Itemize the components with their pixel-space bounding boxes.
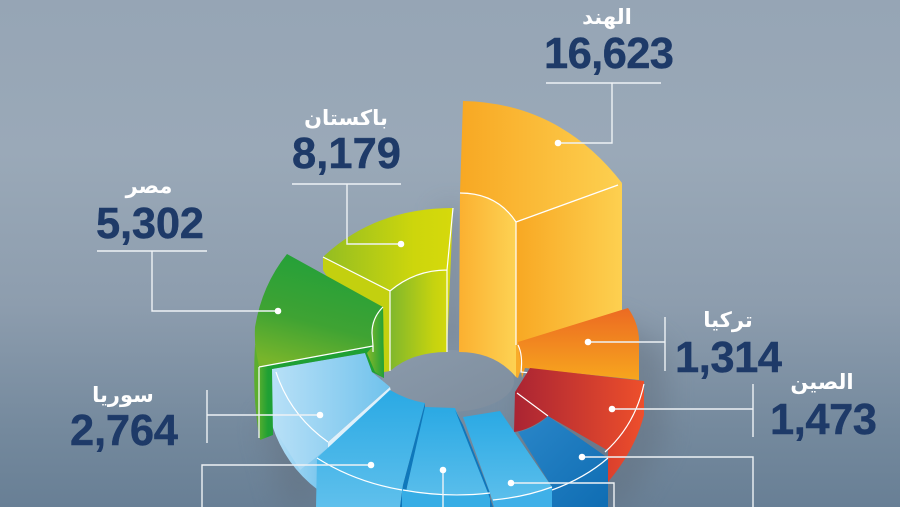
label: China: الصين <box>790 370 854 394</box>
centre hole <box>382 350 514 412</box>
segment: India <box>459 101 622 378</box>
leader: blue left segment <box>202 462 374 507</box>
pie shadow <box>262 210 665 507</box>
segment: Turkey <box>518 308 639 380</box>
segment: Pakistan <box>323 208 453 372</box>
label: Syria: 2,764 <box>70 407 178 455</box>
label: China: 1,473 <box>770 396 877 444</box>
3D pie chart <box>254 101 644 507</box>
segment: China <box>514 368 644 482</box>
label: Pakistan: باكستان <box>304 106 388 130</box>
label: Syria: سوريا <box>92 383 154 407</box>
segment: blue left <box>316 390 425 507</box>
leader: blue right segment <box>508 480 614 507</box>
label: India: 16,623 <box>544 30 674 78</box>
label: Syria <box>70 383 323 455</box>
label: Turkey: 1,314 <box>675 334 782 382</box>
leader: blue middle segment <box>440 467 446 507</box>
label: Egypt: 5,302 <box>96 200 204 248</box>
segment: blue right <box>463 411 552 507</box>
label: India: الهند <box>582 5 632 29</box>
segment: blue middle <box>402 407 493 507</box>
segment: Syria <box>272 353 391 490</box>
label: Egypt <box>96 174 281 314</box>
leader: dark blue segment <box>579 454 753 507</box>
label: China <box>609 370 877 444</box>
segment: Egypt <box>254 254 384 440</box>
label: Turkey <box>585 308 782 382</box>
label: Turkey: تركيا <box>703 308 753 332</box>
segment: dark blue <box>518 416 608 507</box>
label: India <box>544 5 674 146</box>
label: Pakistan: 8,179 <box>292 130 401 178</box>
label: Pakistan <box>292 106 404 247</box>
label: Egypt: مصر <box>125 174 172 198</box>
